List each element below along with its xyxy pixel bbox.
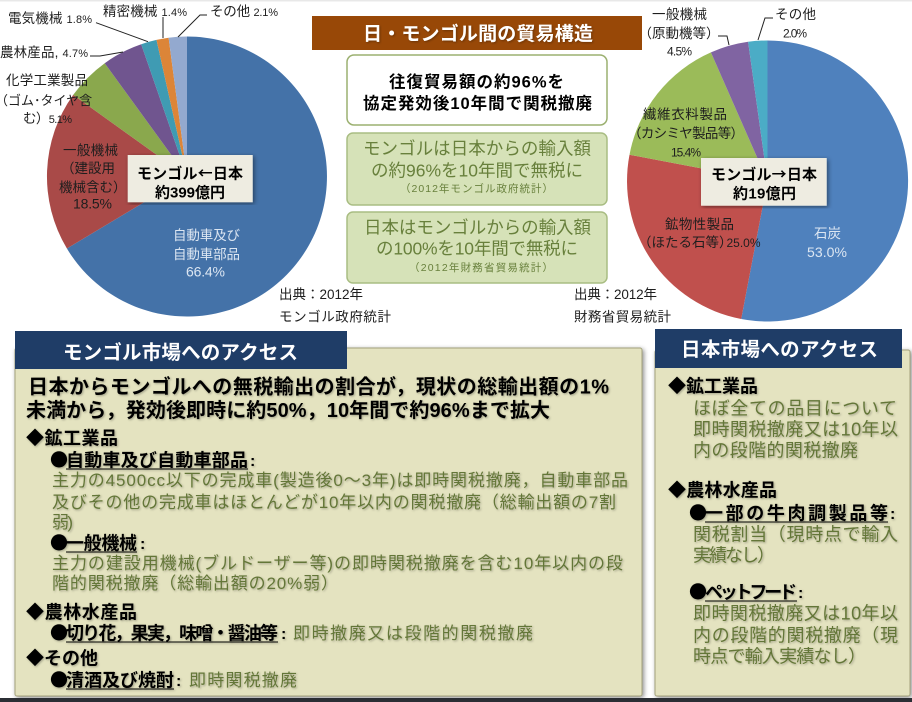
section: agriculture, forestry and fishery goods: 即時撤廃又は段階的関税撤廃 bbox=[293, 624, 533, 643]
section: mining and industrial goods: ◆鉱工業品 bbox=[26, 424, 118, 450]
summary box: Mongolia side bbox=[347, 133, 607, 205]
title bar bbox=[312, 16, 642, 50]
pie labels: Japan imports: 繊維衣料製品 bbox=[643, 107, 727, 122]
section: agriculture, forestry and fishery goods: ペットフード bbox=[705, 578, 797, 604]
summary box: Japan side: 日本はモンゴルからの輸入額 bbox=[364, 218, 592, 238]
callout: Mongolia to Japan total: モンゴル→日本 bbox=[711, 164, 817, 184]
lead text: 日本からモンゴルへの無税輸出の割合が，現状の総輸出額の1% bbox=[28, 375, 609, 399]
panel heading: Japanese market bbox=[655, 329, 902, 368]
callout: Mongolia to Japan total: 約19億円 bbox=[733, 184, 796, 202]
section: agriculture, forestry and fishery goods: 一部の牛肉調製品等 bbox=[705, 500, 888, 526]
section: mining and industrial goods: : bbox=[140, 536, 145, 553]
section: mining and industrial goods: 一般機械 bbox=[66, 530, 137, 556]
pie labels: Japan imports: 4.5% bbox=[667, 44, 692, 58]
pie labels: Mongolia imports: 自動車及び bbox=[173, 228, 240, 243]
section: agriculture, forestry and fishery goods: ● bbox=[50, 620, 68, 646]
section: mining and industrial goods: ● bbox=[50, 446, 68, 472]
summary box: Mongolia side: モンゴルは日本からの輸入額 bbox=[363, 138, 592, 158]
section: agriculture, forestry and fishery goods bbox=[26, 598, 533, 646]
lead text bbox=[26, 375, 609, 422]
section: mining and industrial goods: 内の段階的関税撤廃 bbox=[693, 440, 858, 460]
summary box: Japan side bbox=[347, 212, 607, 283]
panel: access to Mongolian market bbox=[15, 331, 642, 696]
panel heading: Mongolian market bbox=[15, 331, 347, 369]
pie labels: Mongolia imports: 精密機械 1.4% bbox=[103, 4, 187, 19]
title bar: 日・モンゴル間の貿易構造 bbox=[363, 22, 593, 45]
section: agriculture, forestry and fishery goods: 関税割当（現時点で輸入 bbox=[693, 524, 898, 544]
pie labels: Mongolia imports: その他 2.1% bbox=[210, 4, 278, 19]
panel heading: Mongolian market: モンゴル市場へのアクセス bbox=[63, 341, 298, 364]
pie chart: Japan imports from Mongolia bbox=[627, 40, 908, 321]
pie labels: Mongolia imports: 電気機械 1.8% bbox=[8, 11, 92, 26]
pie labels: Japan imports: 2.0% bbox=[783, 26, 807, 40]
section: other goods: ● bbox=[50, 666, 68, 692]
lead text: 未満から，発効後即時に約50%，10年間で約96%まで拡大 bbox=[26, 399, 550, 422]
summary box: Japan side: の100%を10年間で無税に bbox=[376, 238, 578, 258]
source note: right pie bbox=[574, 287, 672, 324]
pie labels: Japan imports: 15.4% bbox=[671, 146, 701, 160]
section: agriculture, forestry and fishery goods: ◆農林水産品 bbox=[26, 598, 137, 624]
callout: Mongolia from Japan total: モンゴル←日本 bbox=[137, 162, 243, 184]
pie labels: Japan imports: 鉱物性製品 bbox=[665, 217, 734, 232]
summary box: Mongolia side: の約96%を10年間で無税に bbox=[371, 160, 583, 180]
section: agriculture, forestry and fishery goods: 切り花，果実，味噌・醤油等 bbox=[66, 620, 278, 646]
source note: left pie bbox=[279, 287, 392, 324]
summary box: overall: 往復貿易額の約96%を bbox=[389, 72, 564, 92]
pie labels: Japan imports: （カシミヤ製品等） bbox=[628, 125, 744, 141]
pie labels: Mongolia imports: 化学工業製品 bbox=[6, 73, 88, 88]
section: agriculture, forestry and fishery goods: : bbox=[281, 626, 286, 643]
pie chart: Mongolia imports from Japan bbox=[47, 36, 327, 316]
pie labels: Mongolia imports: 農林産品, 4.7% bbox=[0, 45, 88, 60]
section: agriculture, forestry and fishery goods: ● bbox=[689, 578, 707, 604]
pie labels: Mongolia imports bbox=[0, 4, 278, 280]
summary box: overall bbox=[347, 55, 607, 125]
summary box: Mongolia side: （2012年モンゴル政府統計） bbox=[400, 182, 553, 195]
section: agriculture, forestry and fishery goods: 内の段階的関税撤廃（現 bbox=[693, 626, 898, 646]
section: mining and industrial goods: 階的関税撤廃（総輸出額の20%弱） bbox=[52, 574, 338, 593]
callout: Mongolia from Japan total bbox=[128, 155, 253, 202]
section: other goods bbox=[26, 644, 297, 692]
section: mining and industrial goods: ◆鉱工業品 bbox=[668, 372, 758, 398]
pie labels: Mongolia imports: 66.4% bbox=[186, 264, 225, 280]
summary box: overall: 協定発効後10年間で関税撤廃 bbox=[363, 93, 592, 113]
summary box: Japan side: （2012年財務省貿易統計） bbox=[409, 261, 553, 274]
callout: Mongolia to Japan total bbox=[701, 158, 827, 206]
pie labels: Japan imports: その他 bbox=[775, 7, 816, 22]
pie labels: Mongolia imports: 18.5% bbox=[73, 196, 112, 212]
panel heading: Japanese market: 日本市場へのアクセス bbox=[681, 339, 878, 361]
section: mining and industrial goods bbox=[668, 372, 898, 460]
section: mining and industrial goods: 即時関税撤廃又は10年以 bbox=[693, 420, 898, 440]
section: mining and industrial goods: 及びその他の完成車はほとんどが10年以内の関税撤廃（総輸出額の7割 bbox=[52, 493, 616, 512]
section: agriculture, forestry and fishery goods: : bbox=[798, 585, 803, 602]
section: agriculture, forestry and fishery goods: ● bbox=[689, 500, 707, 526]
pie labels: Japan imports bbox=[628, 7, 847, 260]
section: other goods: ◆その他 bbox=[26, 644, 98, 670]
section: other goods: 即時関税撤廃 bbox=[189, 671, 297, 690]
pie labels: Japan imports: 53.0% bbox=[807, 244, 847, 260]
pie labels: Mongolia imports: （建設用 bbox=[61, 161, 115, 176]
section: mining and industrial goods: 主力の建設用機械(ブルドーザー等)の即時関税撤廃を含む10年以内の段 bbox=[52, 553, 623, 573]
section: agriculture, forestry and fishery goods: 実績なし） bbox=[693, 546, 775, 566]
section: mining and industrial goods: 主力の4500cc以下の完成車(製造後0～3年)は即時関税撤廃，自動車部品 bbox=[52, 471, 628, 490]
source note: right pie: 出典：2012年 bbox=[574, 287, 657, 302]
source note: left pie: モンゴル政府統計 bbox=[279, 308, 392, 324]
section: mining and industrial goods bbox=[26, 424, 628, 593]
section: other goods: 清酒及び焼酎 bbox=[66, 666, 174, 692]
section: mining and industrial goods: 弱) bbox=[52, 513, 73, 532]
source note: left pie: 出典：2012年 bbox=[279, 287, 363, 302]
pie labels: Mongolia imports: 一般機械 bbox=[63, 143, 118, 158]
section: agriculture, forestry and fishery goods: : bbox=[890, 506, 895, 523]
pie labels: Japan imports: （ほたる石等）25.0% bbox=[638, 234, 761, 250]
section: agriculture, forestry and fishery goods: ◆農林水産品 bbox=[668, 476, 777, 502]
section: mining and industrial goods: ほぼ全ての品目について bbox=[693, 398, 897, 418]
section: other goods: : bbox=[176, 673, 181, 690]
pie labels: Mongolia imports: む）5.1% bbox=[23, 111, 72, 126]
section: mining and industrial goods: : bbox=[250, 453, 255, 470]
pie labels: Japan imports: 石炭 bbox=[814, 226, 841, 241]
pie labels: Mongolia imports: 自動車部品 bbox=[173, 247, 240, 262]
section: mining and industrial goods: 自動車及び自動車部品 bbox=[66, 446, 248, 472]
pie labels: Japan imports: （原動機等） bbox=[638, 25, 720, 41]
pie labels: Mongolia imports: 機械含む） bbox=[59, 180, 126, 195]
section: agriculture, forestry and fishery goods: 時点で輸入実績なし） bbox=[693, 646, 866, 666]
section: agriculture, forestry and fishery goods: 即時関税撤廃又は10年以 bbox=[693, 604, 898, 624]
panel: access to Japanese market bbox=[655, 329, 910, 696]
section: agriculture, forestry and fishery goods bbox=[668, 476, 898, 666]
callout: Mongolia from Japan total: 約399億円 bbox=[155, 184, 225, 202]
section: mining and industrial goods: ● bbox=[50, 530, 68, 556]
pie labels: Japan imports: 一般機械 bbox=[652, 7, 707, 22]
source note: right pie: 財務省貿易統計 bbox=[574, 310, 672, 324]
